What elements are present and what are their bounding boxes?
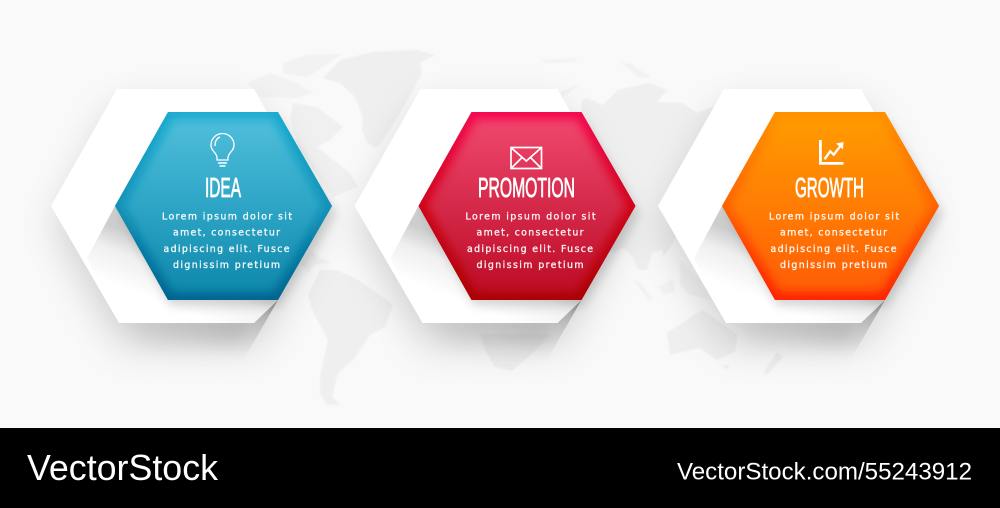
ambient shadow (55, 108, 320, 345)
white hexagon (51, 89, 320, 323)
icon: growth chart (819, 140, 844, 165)
description (162, 212, 292, 271)
world map (247, 50, 783, 405)
ambient shadow (662, 108, 927, 345)
hexagon shadow (424, 120, 640, 306)
description: adipiscing elit. Fusce (164, 244, 290, 255)
shadow strip (839, 300, 885, 352)
inner shadow on white (87, 206, 278, 323)
long shadow below (448, 322, 562, 351)
footer bar (0, 428, 1000, 508)
card: growth (658, 89, 943, 352)
long shadow below (144, 323, 257, 351)
hexagon (414, 108, 640, 304)
heading: promotion: PROMOTION (478, 172, 575, 203)
inner shadow on white (694, 206, 885, 323)
icon: envelope (511, 148, 542, 168)
description (769, 212, 899, 271)
description: adipiscing elit. Fusce (770, 244, 897, 255)
hexagon (110, 108, 336, 304)
description: amet, consectetur (780, 228, 887, 239)
heading: idea: IDEA (205, 172, 241, 203)
long shadow below (752, 322, 864, 351)
icon: light bulb (211, 134, 234, 166)
hexagon shadow (120, 120, 336, 306)
ambient shadow (358, 108, 624, 345)
card: idea (51, 89, 336, 352)
logo text: VectorStock (27, 447, 219, 488)
description: amet, consectetur (173, 228, 280, 239)
heading: growth: GROWTH (795, 172, 864, 203)
description: dignissim pretium (780, 260, 887, 271)
description: Lorem ipsum dolor sit (769, 212, 899, 222)
white hexagon (658, 89, 927, 323)
description: Lorem ipsum dolor sit (162, 212, 292, 222)
description: dignissim pretium (476, 260, 584, 271)
card: promotion (354, 89, 640, 352)
description: dignissim pretium (173, 260, 280, 271)
description: amet, consectetur (476, 228, 584, 239)
shadow strip (536, 300, 582, 352)
description (466, 212, 596, 271)
inner shadow on white (390, 206, 582, 323)
white hexagon (354, 89, 624, 323)
hexagon (717, 108, 943, 304)
description: Lorem ipsum dolor sit (466, 212, 596, 222)
shadow strip (232, 300, 278, 352)
image url: VectorStock.com/55243912 (677, 458, 972, 486)
description: adipiscing elit. Fusce (467, 244, 593, 255)
hexagon shadow (727, 120, 943, 306)
